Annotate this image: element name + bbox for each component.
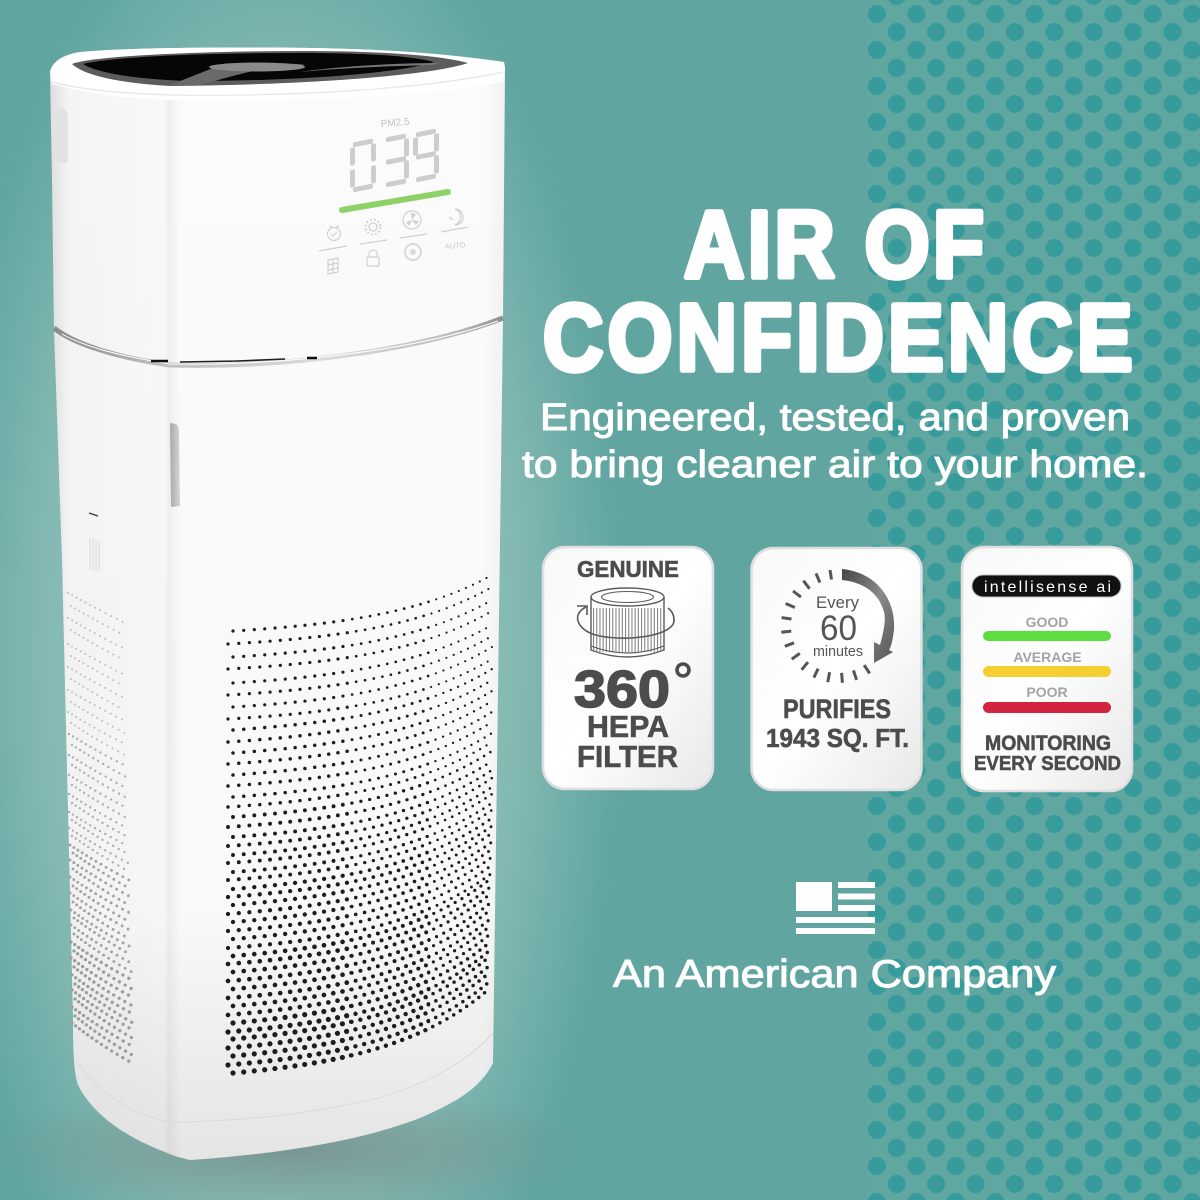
digit 3	[386, 133, 409, 187]
air quality light bar	[342, 192, 448, 210]
red bar	[983, 702, 1111, 713]
area label: 1943 SQ. FT.	[766, 723, 909, 753]
card: 360 HEPA filter	[543, 547, 713, 789]
GOOD label: GOOD	[1026, 614, 1068, 630]
icon: flag	[796, 882, 875, 934]
top air outlet	[72, 51, 468, 86]
front perforated grille	[228, 575, 492, 1073]
side handle slot	[170, 423, 180, 507]
degree symbol	[677, 664, 689, 676]
subheading line 2: to bring cleaner air to your home.	[522, 444, 1148, 486]
GENUINE label: GENUINE	[577, 556, 679, 582]
360 degrees figure: 360	[574, 661, 670, 719]
chrome seam band	[54, 318, 503, 365]
minutes label: minutes	[813, 643, 863, 660]
60 figure: 60	[820, 609, 857, 648]
side perforated grille	[68, 593, 134, 1064]
PM2.5 label: PM2.5	[380, 116, 410, 130]
side sensor mark	[89, 513, 98, 516]
headline	[543, 191, 1133, 390]
HEPA label: HEPA	[587, 709, 669, 744]
icon: clockwise arrow	[842, 569, 894, 663]
MONITORING label: MONITORING	[985, 732, 1111, 755]
intellisense ai badge	[972, 575, 1121, 597]
icon: filter cartridge	[577, 588, 674, 657]
PURIFIES label: PURIFIES	[783, 694, 891, 724]
POOR label: POOR	[1026, 684, 1068, 700]
Every label: Every	[816, 593, 859, 612]
FILTER label: FILTER	[577, 739, 678, 774]
card: intellisense ai monitoring	[962, 547, 1132, 791]
air purifier product	[50, 47, 505, 1160]
AVERAGE label: AVERAGE	[1013, 649, 1082, 665]
yellow bar	[983, 666, 1111, 677]
display: PM2.5 reading	[342, 116, 448, 210]
subheading	[522, 397, 1148, 486]
purifier body shell	[50, 47, 505, 1160]
EVERY SECOND label: EVERY SECOND	[974, 752, 1121, 775]
headline line 2: CONFIDENCE	[543, 284, 1133, 390]
intellisense ai badge: intellisense ai	[984, 579, 1111, 596]
headline line 1: AIR OF	[684, 191, 984, 297]
digit 9	[413, 128, 439, 183]
green bar	[983, 631, 1111, 641]
side vent lines	[90, 538, 99, 572]
card: purifies every 60 minutes	[752, 548, 922, 790]
AUTO label: AUTO	[444, 240, 466, 251]
digit 0	[350, 138, 376, 193]
subheading line 1: Engineered, tested, and proven	[540, 397, 1130, 439]
control panel icons	[319, 209, 468, 274]
An American Company label: An American Company	[613, 953, 1057, 996]
icon: clock ticks	[781, 570, 870, 683]
